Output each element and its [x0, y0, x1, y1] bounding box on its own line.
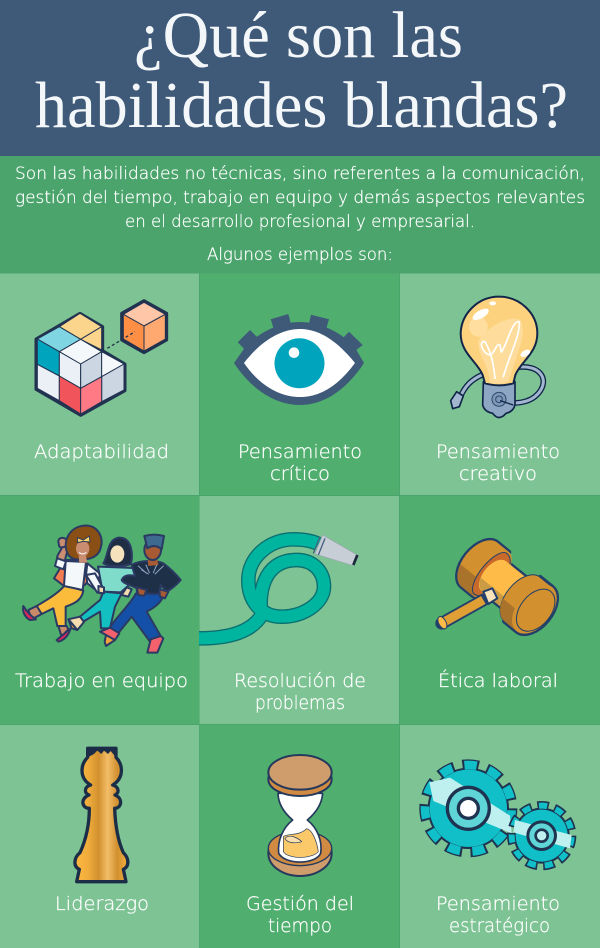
- label: [246, 893, 354, 937]
- label: Trabajo en equipo: [15, 670, 188, 692]
- label: Pensamiento: [238, 441, 362, 463]
- label: creativo: [459, 463, 537, 485]
- header band with title: [0, 0, 600, 156]
- label: Adaptabilidad: [34, 441, 169, 463]
- big gear: [424, 764, 512, 852]
- label: tiempo: [268, 915, 332, 937]
- intro text: gestión del tiempo, trabajo en equipo y demás aspectos relevantes: [15, 188, 585, 208]
- icon: gears: [424, 764, 572, 866]
- label: problemas: [255, 692, 345, 714]
- label: Pensamiento: [436, 441, 560, 463]
- label: [238, 441, 362, 485]
- icon: gavel: [436, 532, 566, 642]
- label: [436, 441, 560, 485]
- gavel head: [449, 532, 566, 642]
- label: Resolución de: [234, 670, 366, 692]
- icon: cubes: [36, 301, 167, 415]
- icon: light bulb: [451, 297, 543, 417]
- panel: Liderazgo: [0, 725, 199, 948]
- person two: [68, 538, 138, 646]
- label: Gestión del: [246, 893, 354, 915]
- panel: Pensamiento estratégico: [400, 725, 600, 948]
- panel: Resolución de problemas: [199, 496, 399, 724]
- label: Pensamiento: [436, 893, 560, 915]
- icon: chess piece: [75, 748, 128, 882]
- title: [35, 0, 568, 142]
- label: estratégico: [449, 915, 550, 937]
- title: habilidades blandas?: [35, 69, 568, 142]
- intro text: Algunos ejemplos son:: [207, 245, 393, 265]
- panel: Pensamiento creativo: [400, 274, 600, 495]
- label: crítico: [270, 463, 330, 485]
- small gear: [511, 805, 572, 866]
- panel: Pensamiento crítico: [200, 274, 399, 495]
- person three: [100, 535, 181, 653]
- intro text: en el desarrollo profesional y empresarial.: [125, 212, 475, 232]
- icon: garden hose: [199, 535, 359, 638]
- icon: team of three people: [23, 525, 181, 653]
- panel: Ética laboral: [400, 496, 600, 724]
- person one: [23, 525, 104, 642]
- icon: eye with gear teeth: [234, 314, 364, 405]
- title: ¿Qué son las: [134, 0, 463, 72]
- panel: Trabajo en equipo: [0, 496, 199, 724]
- panel: Adaptabilidad: [0, 274, 199, 495]
- label: [436, 893, 560, 937]
- label: [234, 670, 366, 714]
- label: Liderazgo: [55, 893, 149, 915]
- intro text: Son las habilidades no técnicas, sino referentes a la comunicación,: [15, 164, 585, 184]
- intro text: [15, 164, 585, 265]
- icon: hourglass: [268, 755, 332, 876]
- panel: Gestión del tiempo: [200, 725, 399, 948]
- label: Ética laboral: [438, 669, 558, 692]
